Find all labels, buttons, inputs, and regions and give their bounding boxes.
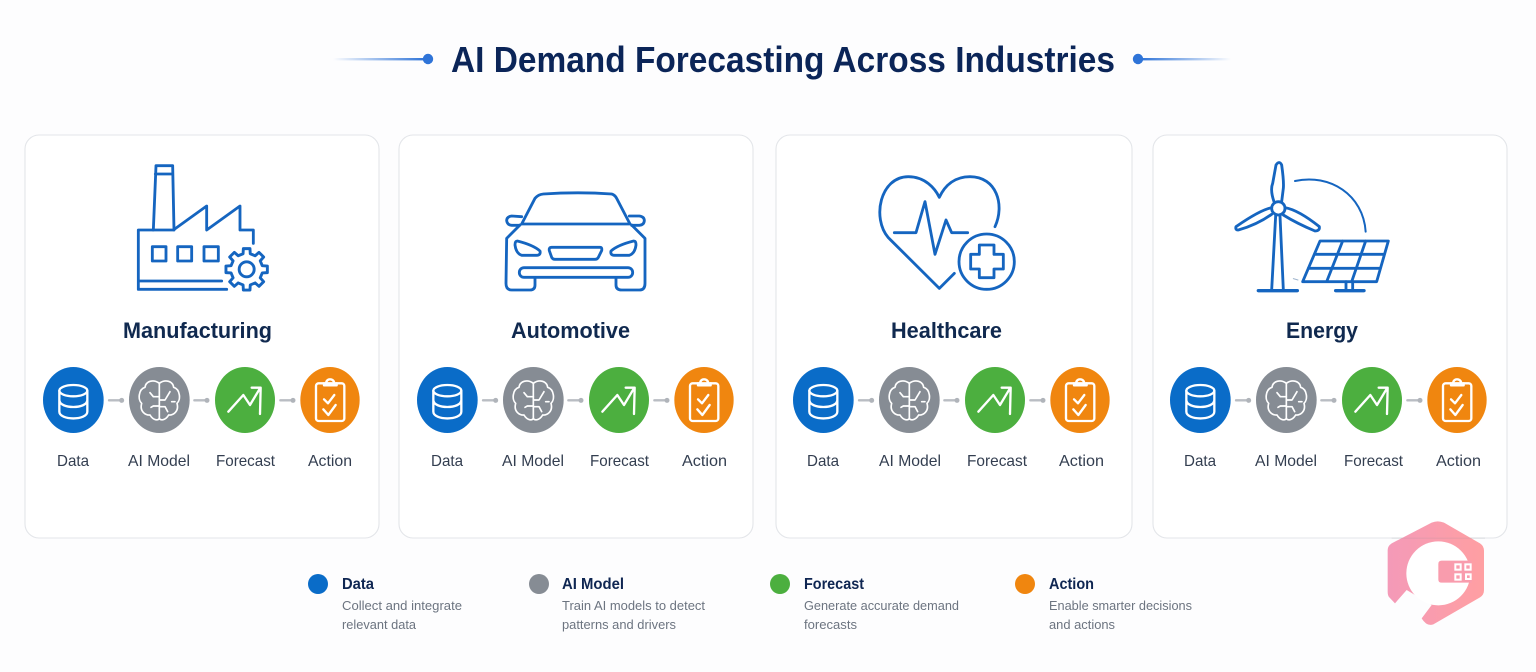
process labels: AI Model <box>502 453 564 470</box>
icon: factory <box>138 166 267 290</box>
panel: Healthcare <box>776 135 1132 538</box>
legend item: AI Model <box>529 574 705 632</box>
legend item: Action: Action <box>1049 576 1094 593</box>
process labels: Action <box>308 453 352 470</box>
title ornament: left line <box>333 54 433 64</box>
process labels: Data <box>1184 453 1216 470</box>
legend item: Forecast: forecasts <box>804 617 857 632</box>
process labels: Forecast <box>590 453 650 470</box>
heading: Automotive: Automotive <box>511 318 630 343</box>
panel: Automotive <box>399 135 753 538</box>
process labels: Action <box>682 453 727 470</box>
process labels <box>57 453 352 470</box>
legend item: Data: Data <box>342 576 374 593</box>
process flow icons <box>1170 367 1487 433</box>
icon: heart with plus <box>880 177 1014 289</box>
legend item: Action: Enable smarter decisions <box>1049 598 1192 613</box>
legend item: Forecast: Forecast <box>804 576 864 593</box>
process labels: Forecast <box>216 453 276 470</box>
process labels: AI Model <box>128 453 190 470</box>
process labels: Action <box>1436 453 1481 470</box>
panel: Energy <box>1153 135 1507 538</box>
process labels: Data <box>807 453 839 470</box>
process flow icons <box>43 367 360 433</box>
legend <box>308 574 1192 632</box>
process labels: Action <box>1059 453 1104 470</box>
legend item: Action <box>1015 574 1192 632</box>
heading: Manufacturing: Manufacturing <box>123 318 272 343</box>
legend item: Data: Collect and integrate <box>342 598 462 613</box>
legend item: AI Model: Train AI models to detect <box>562 598 705 613</box>
watermark logo <box>1388 521 1485 625</box>
process flow icons <box>793 367 1110 433</box>
title: AI Demand Forecasting Across Industries <box>451 39 1115 80</box>
process labels: AI Model <box>1255 453 1317 470</box>
legend item: Action: and actions <box>1049 617 1115 632</box>
icon: wind turbine and solar panel <box>1236 162 1388 291</box>
process flow icons <box>417 367 734 433</box>
process labels <box>807 453 1104 470</box>
process labels: Forecast <box>967 453 1028 470</box>
heading: Healthcare: Healthcare <box>891 318 1002 343</box>
process labels: AI Model <box>879 453 941 470</box>
process labels: Forecast <box>1344 453 1404 470</box>
legend item: AI Model: AI Model <box>562 576 624 593</box>
heading: Energy: Energy <box>1286 318 1359 343</box>
icon: car <box>506 193 645 290</box>
panel: Manufacturing <box>25 135 379 538</box>
legend item: Data <box>308 574 462 632</box>
process labels: Data <box>431 453 463 470</box>
title ornament: right line <box>1133 54 1231 64</box>
legend item: Data: relevant data <box>342 617 417 632</box>
legend item: AI Model: patterns and drivers <box>562 617 676 632</box>
process labels <box>1184 453 1481 470</box>
legend item: Forecast: Generate accurate demand <box>804 598 959 613</box>
legend item: Forecast <box>770 574 959 632</box>
process labels: Data <box>57 453 89 470</box>
process labels <box>431 453 727 470</box>
